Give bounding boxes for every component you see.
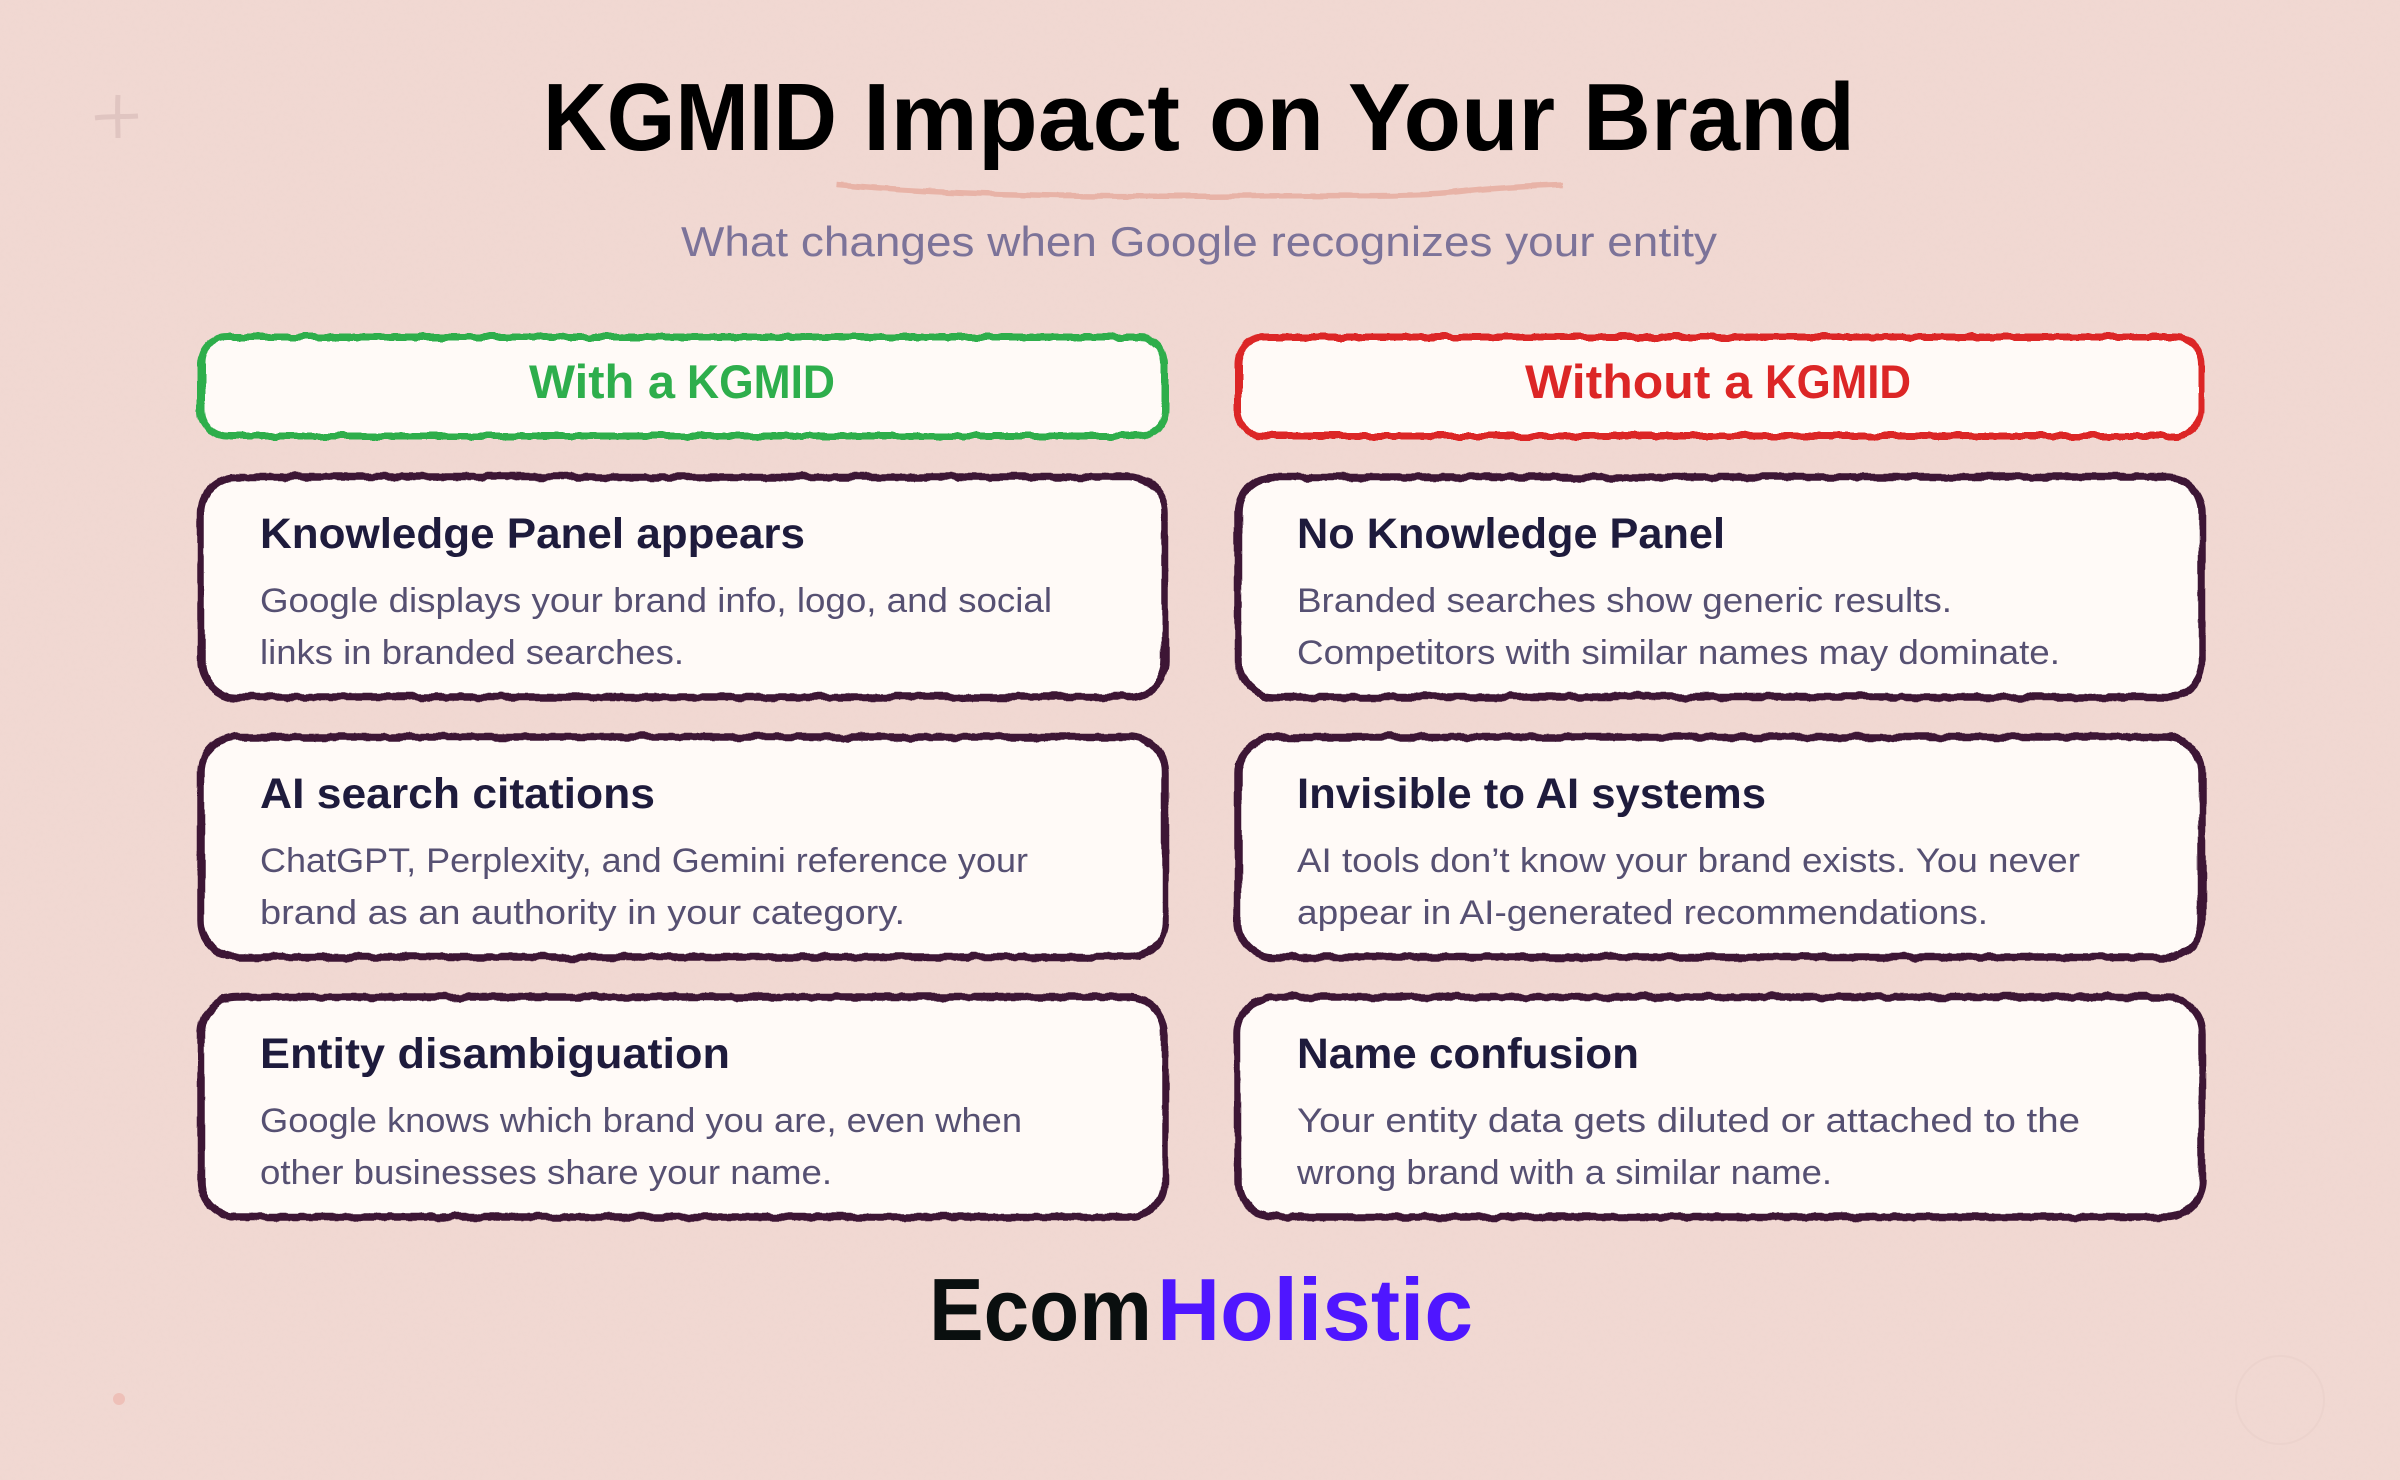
card description: appear in AI-generated recommendations. xyxy=(1297,894,1988,932)
card description: Google displays your brand info, logo, and social xyxy=(260,582,1052,620)
card description xyxy=(1297,582,2060,672)
card description: Branded searches show generic results. xyxy=(1297,582,1952,620)
card description xyxy=(1297,842,2080,932)
card: Knowledge Panel appears xyxy=(201,477,1165,697)
card description: ChatGPT, Perplexity, and Gemini reference your xyxy=(260,842,1028,880)
card heading: Name confusion xyxy=(1297,1030,1639,1078)
card heading: AI search citations xyxy=(260,770,655,818)
header label: Without a xyxy=(1525,355,1753,408)
card description xyxy=(1296,1102,2080,1192)
decoration: plus sign xyxy=(95,95,138,138)
card description: wrong brand with a similar name. xyxy=(1296,1154,1832,1192)
title: Brand xyxy=(1583,64,1855,171)
card: No Knowledge Panel xyxy=(1238,477,2202,697)
decoration: circle outline xyxy=(2236,1356,2324,1444)
title: Impact xyxy=(863,64,1180,171)
header label: With a xyxy=(529,355,676,408)
column header: without a KGMID xyxy=(1238,337,2202,436)
card heading: Invisible to AI systems xyxy=(1297,770,1766,818)
card description: Competitors with similar names may dominate. xyxy=(1297,634,2060,672)
card heading: Entity disambiguation xyxy=(260,1030,730,1078)
column header: with a KGMID xyxy=(201,337,1165,436)
card: Invisible to AI systems xyxy=(1238,737,2202,957)
card: Entity disambiguation xyxy=(201,997,1165,1217)
card: Name confusion xyxy=(1238,997,2202,1217)
card description xyxy=(260,582,1052,672)
header label: KGMID xyxy=(1765,355,1911,408)
card description: Google knows which brand you are, even when xyxy=(260,1102,1022,1140)
title: Your xyxy=(1348,64,1555,171)
brand logo: Holistic xyxy=(1157,1260,1473,1359)
card description: other businesses share your name. xyxy=(260,1154,832,1192)
header box xyxy=(201,337,1165,436)
card description: Your entity data gets diluted or attached to the xyxy=(1297,1102,2080,1140)
card heading: No Knowledge Panel xyxy=(1297,510,1725,558)
title xyxy=(543,64,1855,171)
subtitle: What changes when Google recognizes your entity xyxy=(681,218,1717,265)
card description: links in branded searches. xyxy=(260,634,684,672)
header label xyxy=(1525,355,1911,408)
card description xyxy=(260,842,1028,932)
card: AI search citations xyxy=(201,737,1165,957)
header box xyxy=(1238,337,2202,436)
decoration: dot xyxy=(113,1393,125,1405)
title underline xyxy=(837,185,1563,196)
header label: KGMID xyxy=(687,355,835,408)
title: on xyxy=(1209,64,1324,171)
card description: AI tools don’t know your brand exists. You never xyxy=(1297,842,2080,880)
title: KGMID xyxy=(543,64,837,171)
card description: brand as an authority in your category. xyxy=(260,894,905,932)
brand logo xyxy=(929,1260,1473,1359)
brand logo: Ecom xyxy=(929,1260,1152,1359)
card heading: Knowledge Panel appears xyxy=(260,510,805,558)
header label xyxy=(529,355,835,408)
card description xyxy=(260,1102,1022,1192)
